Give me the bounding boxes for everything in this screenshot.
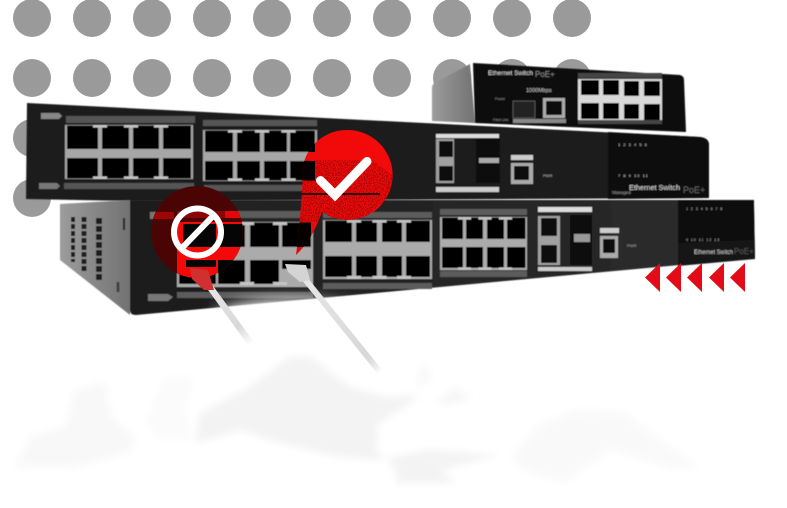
side vents [73, 217, 124, 292]
icon: prohibited sign [174, 208, 221, 256]
PoE ports [578, 73, 662, 78]
top switch [432, 63, 686, 132]
uplink ports [436, 134, 499, 138]
label strips [148, 209, 527, 301]
top switch: Ethernet Switch [488, 70, 533, 77]
fog over switch base [215, 300, 365, 336]
management panel text: Ethernet Switch [694, 250, 733, 256]
ports group 2 [203, 130, 317, 181]
middle switch: 7 8 9 10 11 [618, 173, 649, 178]
cables [207, 278, 380, 372]
middle switch [26, 103, 709, 201]
top switch: 1000Mbps [526, 88, 552, 94]
middle switch: Managed [612, 190, 631, 195]
ports group 1 [65, 125, 193, 179]
management panel text: Ethernet Switch [629, 183, 680, 192]
top switch: PoE+ [535, 70, 555, 79]
ports group 2 [323, 220, 432, 279]
check bubble [296, 130, 393, 255]
top switch: Fiber Link [493, 118, 509, 122]
clouds [15, 357, 700, 483]
front switch [60, 200, 755, 315]
ports group 3 [440, 217, 527, 270]
uplink ports [538, 207, 592, 212]
cable: right [304, 278, 380, 372]
prohibited bubble [151, 186, 243, 278]
ports group 1 [177, 222, 313, 287]
front switch: 1 2 3 4 5 6 7 8 [686, 207, 723, 211]
connector: right plug [285, 264, 310, 282]
middle switch: PWR [543, 173, 552, 178]
label strips [39, 113, 318, 191]
connector: left plug [190, 268, 214, 290]
middle switch: PoE+ [683, 185, 705, 195]
red arrows [645, 263, 745, 292]
background dot grid [13, 0, 591, 217]
SFP and RJ45 uplink [513, 101, 535, 118]
front switch: 9 10 11 12 13 [686, 238, 720, 242]
top switch: Power [495, 97, 506, 101]
icon: check mark [320, 162, 367, 195]
front switch: PoE+ [734, 247, 754, 256]
cable: left [207, 283, 252, 345]
middle switch: 1 2 3 4 5 6 [618, 142, 648, 147]
front switch: PWR [627, 243, 636, 248]
